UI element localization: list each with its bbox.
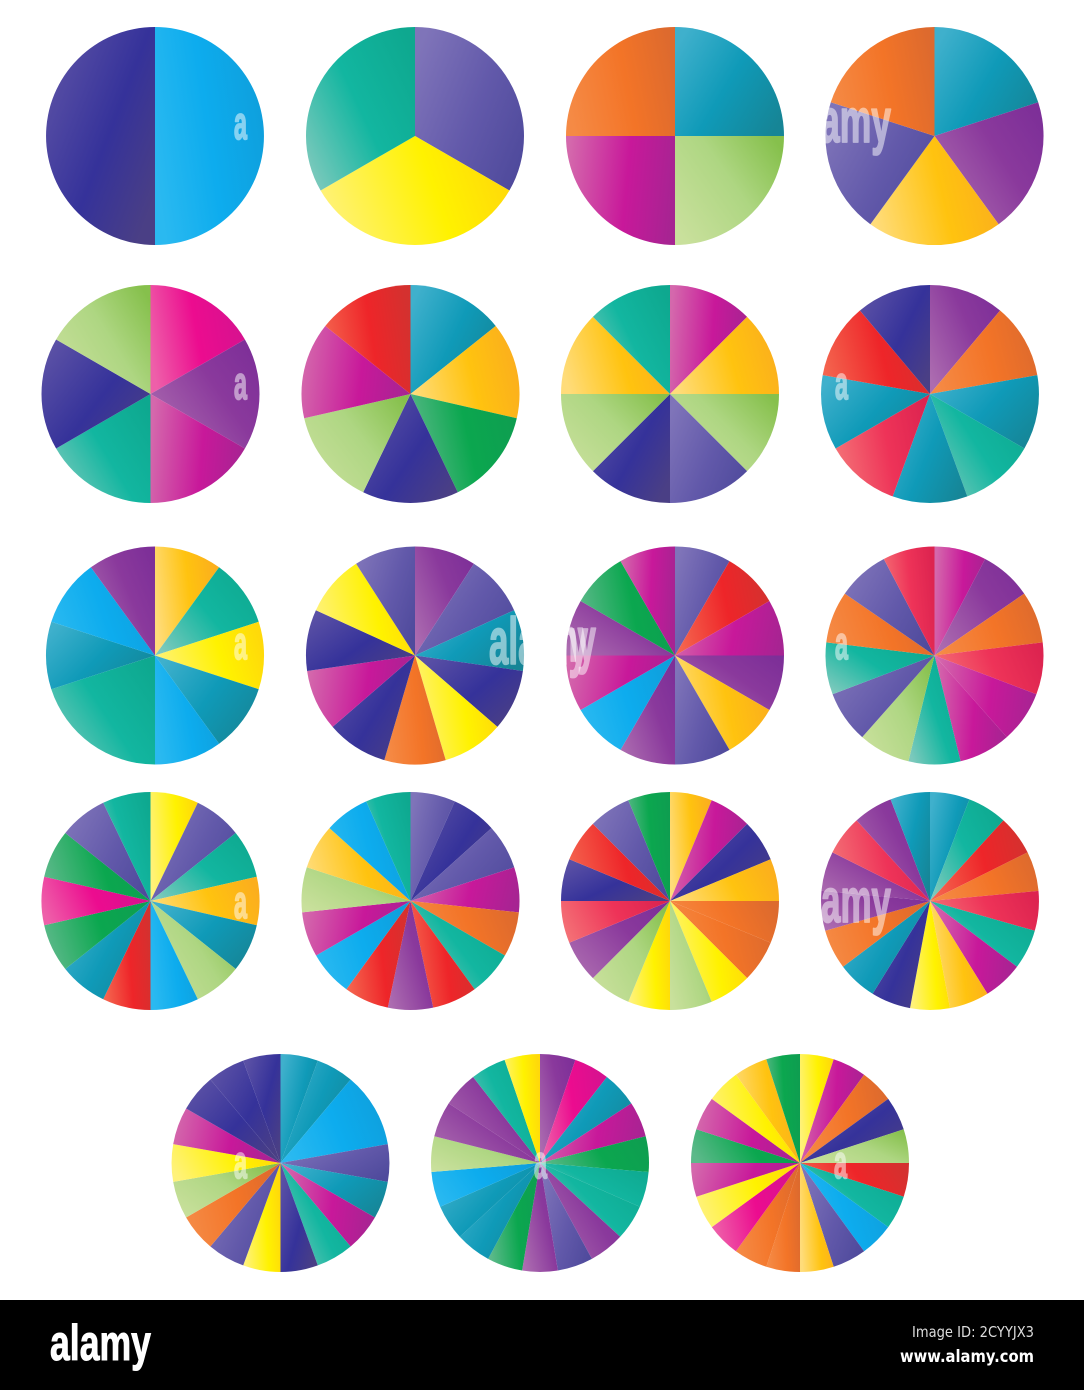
pie chart: 4 slices [566,27,784,245]
watermark letters: a [234,876,247,928]
pie chart: 19 slices [431,1054,649,1272]
pie chart: 17 slices [821,792,1039,1010]
pie chart: 10 slices [46,546,264,764]
pie chart: 6 slices [41,285,260,503]
watermark letters: a [534,1136,547,1188]
pie chart: 2 slices [46,27,264,245]
watermark letters: amy [820,87,891,156]
pie chart: 5 slices [825,27,1044,245]
pie chart: 12 slices [566,546,784,764]
pie chart: 9 slices [821,285,1039,503]
pie chart: 13 slices [826,546,1043,764]
watermark letters [234,87,891,1188]
watermark letters: alamy [489,604,588,678]
pie chart: 18 slices [172,1054,389,1272]
website: www.alamy.com [900,1347,1034,1367]
pie chart: 7 slices [301,285,520,503]
watermark letters: a [835,357,848,409]
pie chart: 20 slices [691,1054,909,1272]
pie chart: 8 slices [561,285,779,503]
footer logo: alamy [50,1315,151,1371]
watermark letters: a [234,617,247,669]
pie chart: 14 slices [41,792,260,1010]
watermark letters: my [548,606,596,675]
watermark letters: a [234,1136,247,1188]
watermark letters: a [234,97,247,149]
image id: Image ID: 2CYYJX3 [912,1323,1034,1341]
watermark letters: amy [821,867,891,936]
footer bar [0,1300,1084,1390]
pie chart: 11 slices [306,546,524,765]
watermark letters: a [835,617,848,669]
watermark letters: a [234,357,247,409]
pie chart: 3 slices [306,27,524,245]
pie chart: 16 slices [561,792,779,1010]
watermark letters: a [834,1136,847,1188]
pie chart: 15 slices [301,792,520,1010]
